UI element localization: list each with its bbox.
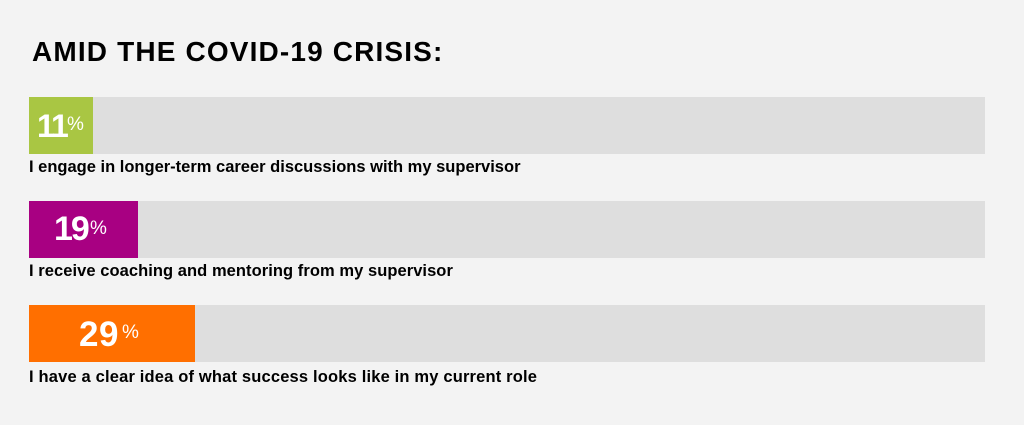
bar 1 track — [29, 97, 985, 154]
percent sign: % — [67, 114, 84, 135]
label 1: I engage in longer-term career discussions with my supervisor — [29, 158, 520, 176]
bar 1 fill 11% — [29, 97, 93, 154]
value 19: 19 — [54, 210, 88, 248]
percent sign: % — [90, 218, 107, 239]
title: AMID THE COVID-19 CRISIS: — [32, 36, 443, 67]
bar 3 fill 29% — [29, 305, 195, 362]
value 29: 29 — [79, 315, 119, 354]
bar 2 fill 19% — [29, 201, 138, 258]
bar 3 track — [29, 305, 985, 362]
percent sign: % — [122, 322, 139, 343]
value 11: 11 — [37, 108, 67, 144]
label 3: I have a clear idea of what success looks like in my current role — [29, 368, 537, 386]
bar 2 track — [29, 201, 985, 258]
label 2: I receive coaching and mentoring from my supervisor — [29, 262, 453, 280]
